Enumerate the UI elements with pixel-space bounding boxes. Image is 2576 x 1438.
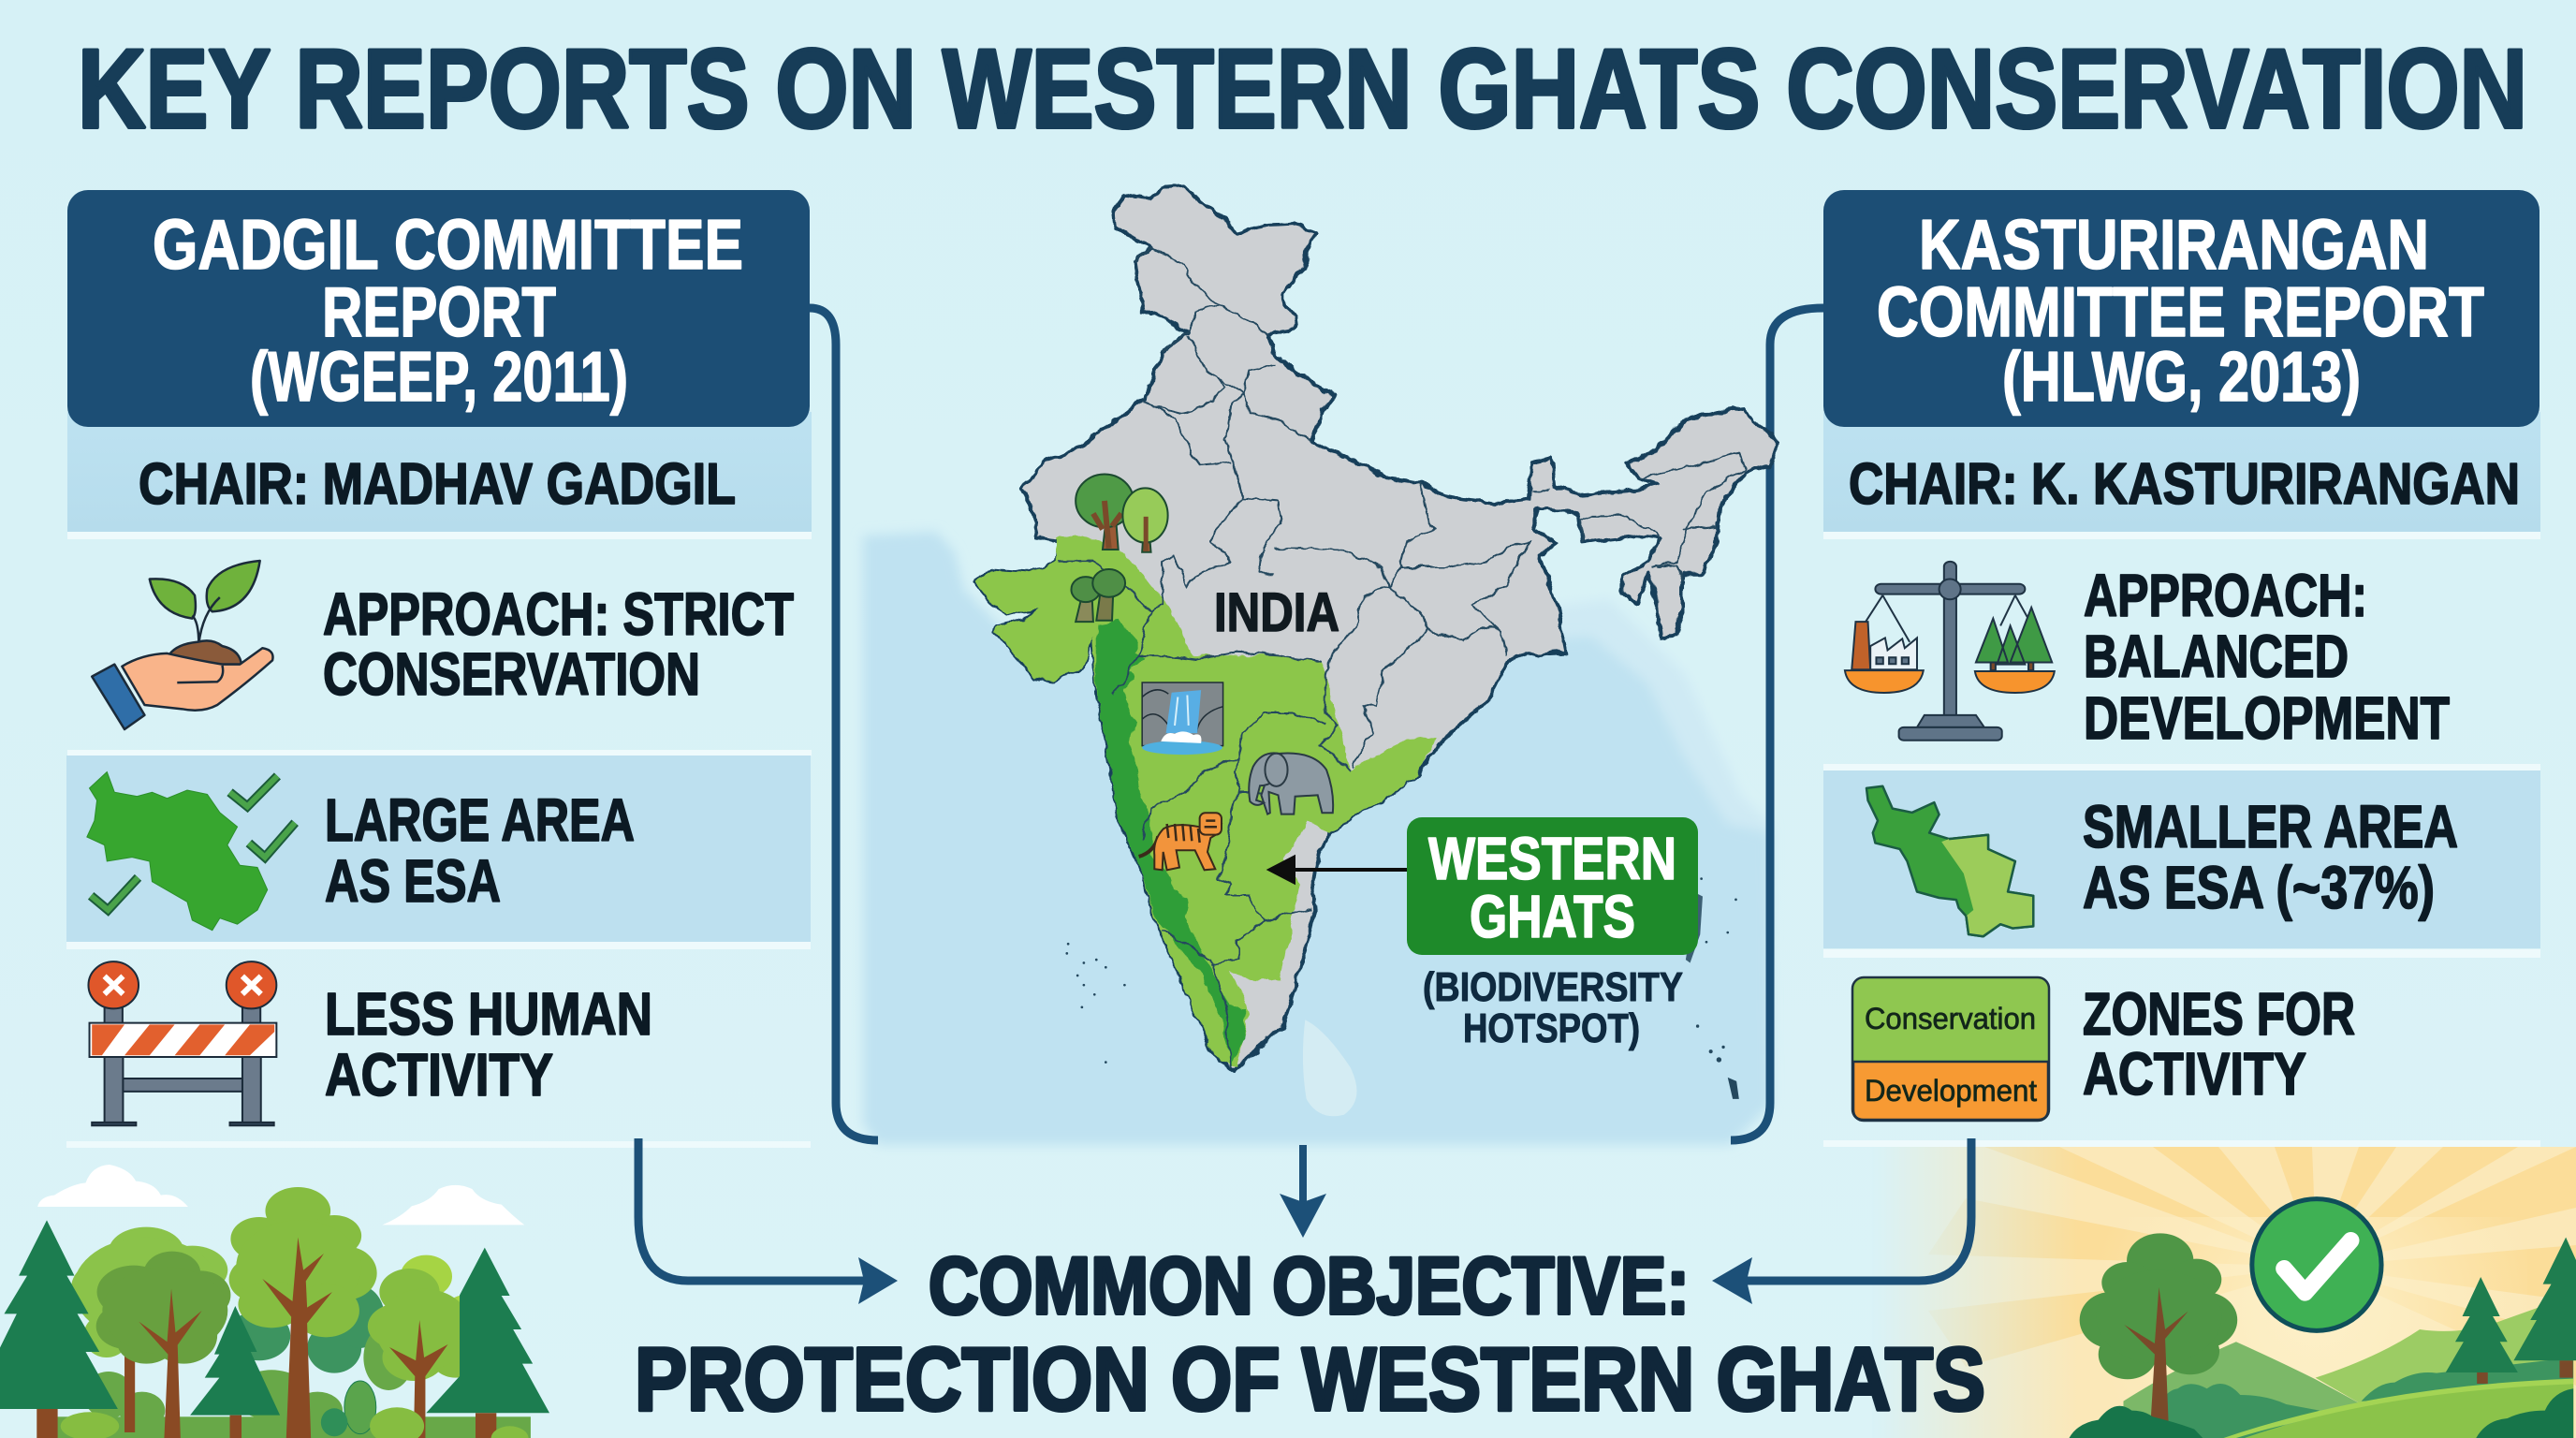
label: biodiversity hotspot: HOTSPOT): [1463, 1005, 1640, 1051]
panel: India map: [810, 186, 1823, 1145]
row: large area: [66, 756, 811, 949]
icon: waterfall: [1142, 682, 1223, 755]
pines on right: [2446, 1238, 2576, 1384]
common objective text: PROTECTION OF WESTERN GHATS: [635, 1329, 1985, 1430]
map: dark green Ghats strip: [1096, 621, 1247, 1067]
icon: trees Gujarat: [1071, 569, 1125, 622]
arrow to Western Ghats: [1270, 858, 1407, 882]
header: [1823, 190, 2539, 427]
label: Western Ghats: GHATS: [1470, 883, 1635, 950]
icon: balance scale: [1845, 562, 2055, 741]
map: India outline: [974, 186, 1778, 1070]
icon: trees north: [1076, 475, 1168, 552]
icon: tiger: [1139, 813, 1222, 870]
ground plants: [61, 1381, 529, 1438]
Sri Lanka: [1303, 1020, 1357, 1116]
tree on right: [2080, 1233, 2237, 1423]
common objective text: [635, 1241, 1985, 1430]
row: less human activity: ACTIVITY: [325, 1041, 553, 1108]
row: zones: ZONES FOR: [2083, 980, 2355, 1048]
icon: barrier: [88, 961, 276, 1125]
label: Western Ghats: [1407, 817, 1698, 955]
icon: elephant: [1249, 753, 1333, 814]
row: zones: ACTIVITY: [2083, 1040, 2306, 1108]
header: GADGIL COMMITTEE: [153, 205, 743, 284]
row: approach: [1823, 562, 2540, 770]
row: approach: APPROACH:: [2084, 562, 2367, 629]
common objective text: COMMON OBJECTIVE:: [929, 1241, 1690, 1331]
header: (HLWG, 2013): [2002, 337, 2361, 416]
pines: [0, 1220, 549, 1438]
icon: zones box: [1852, 977, 2049, 1121]
forest scene: bottom left: [0, 1165, 549, 1438]
row: smaller area: AS ESA (~37%): [2083, 854, 2435, 921]
map: light green region: [974, 536, 1438, 1067]
trees group: [71, 1187, 484, 1438]
label: biodiversity hotspot: (BIODIVERSITY: [1423, 964, 1683, 1010]
row: large area: LARGE AREA: [325, 786, 635, 854]
India label: INDIA: [1214, 582, 1339, 643]
arrow: map to objective: [1280, 1145, 1326, 1238]
icon: green check badge: [2252, 1199, 2381, 1330]
header: [67, 190, 810, 427]
row: approach: DEVELOPMENT: [2084, 684, 2450, 752]
panel: Gadgil report: [66, 190, 812, 1148]
frame right: [1731, 308, 1823, 1140]
icon: green area map with checks: [87, 772, 295, 931]
row: less human activity: LESS HUMAN: [325, 980, 652, 1048]
row: smaller area: [1823, 770, 2540, 958]
header: REPORT: [322, 272, 556, 351]
row: large area: AS ESA: [325, 847, 501, 915]
row: zones: [1823, 977, 2540, 1147]
row: approach: APPROACH: STRICT: [323, 580, 794, 648]
header: (WGEEP, 2011): [250, 337, 628, 416]
clouds: [37, 1165, 524, 1225]
arrow: right report to objective: [1712, 1138, 1971, 1304]
chair name: CHAIR: MADHAV GADGIL: [139, 452, 736, 517]
row: approach: [67, 561, 812, 756]
row: less human activity: [66, 961, 811, 1148]
sea: [863, 532, 1771, 1145]
row: approach: CONSERVATION: [323, 640, 700, 708]
row: smaller area: SMALLER AREA: [2083, 793, 2458, 860]
map: state borders: [1059, 248, 1746, 1067]
row: approach: BALANCED: [2084, 623, 2349, 690]
label: Western Ghats: WESTERN: [1428, 825, 1676, 892]
label: biodiversity hotspot: [1423, 964, 1683, 1051]
arrow: left report to objective: [638, 1138, 898, 1304]
chair band: [67, 412, 812, 532]
icon: zones box: Conservation: [1865, 1002, 2036, 1035]
sunny landscape: bottom right: [1872, 1147, 2576, 1438]
icon: zones box: Development: [1865, 1074, 2037, 1108]
panel: Kasturirangan report: [1823, 190, 2540, 1147]
icon: hand with sapling: [92, 561, 273, 729]
frame left: [810, 308, 878, 1140]
icon: partial ESA map: [1866, 786, 2033, 936]
islands: [1065, 877, 1739, 1099]
header: KASTURIRANGAN: [1919, 205, 2429, 284]
chair band: [1823, 412, 2540, 532]
back bushes: [54, 1370, 531, 1438]
